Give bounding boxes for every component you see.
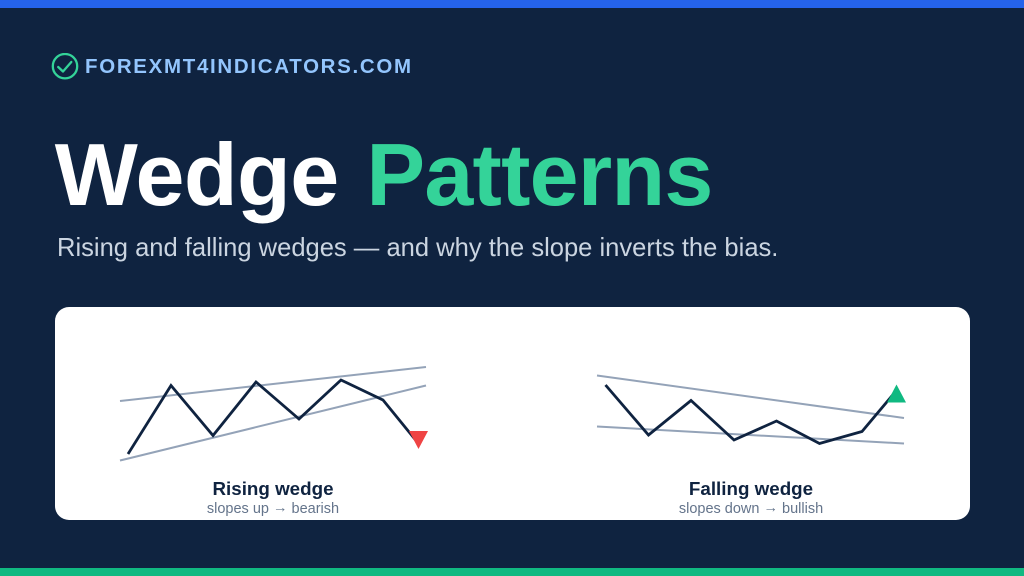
bottom accent bar [0,568,1024,576]
brand name: FOREXMT4INDICATORS.COM [85,54,413,78]
rising wedge note: slopes up → bearish [207,500,339,517]
falling wedge note: slopes down → bullish [679,500,823,517]
top accent bar [0,0,1024,8]
subtitle: Rising and falling wedges — and why the slope inverts the bias. [57,234,778,262]
chart: rising wedge [120,366,428,462]
falling wedge name: Falling wedge [689,478,813,498]
panel: wedge diagrams [55,307,970,520]
title: Wedge Patterns [55,124,713,224]
chart: falling wedge [596,374,906,445]
icon: check badge [52,53,78,80]
rising wedge name: Rising wedge [212,478,334,498]
label: rising wedge [207,478,339,517]
label: falling wedge [679,478,823,517]
